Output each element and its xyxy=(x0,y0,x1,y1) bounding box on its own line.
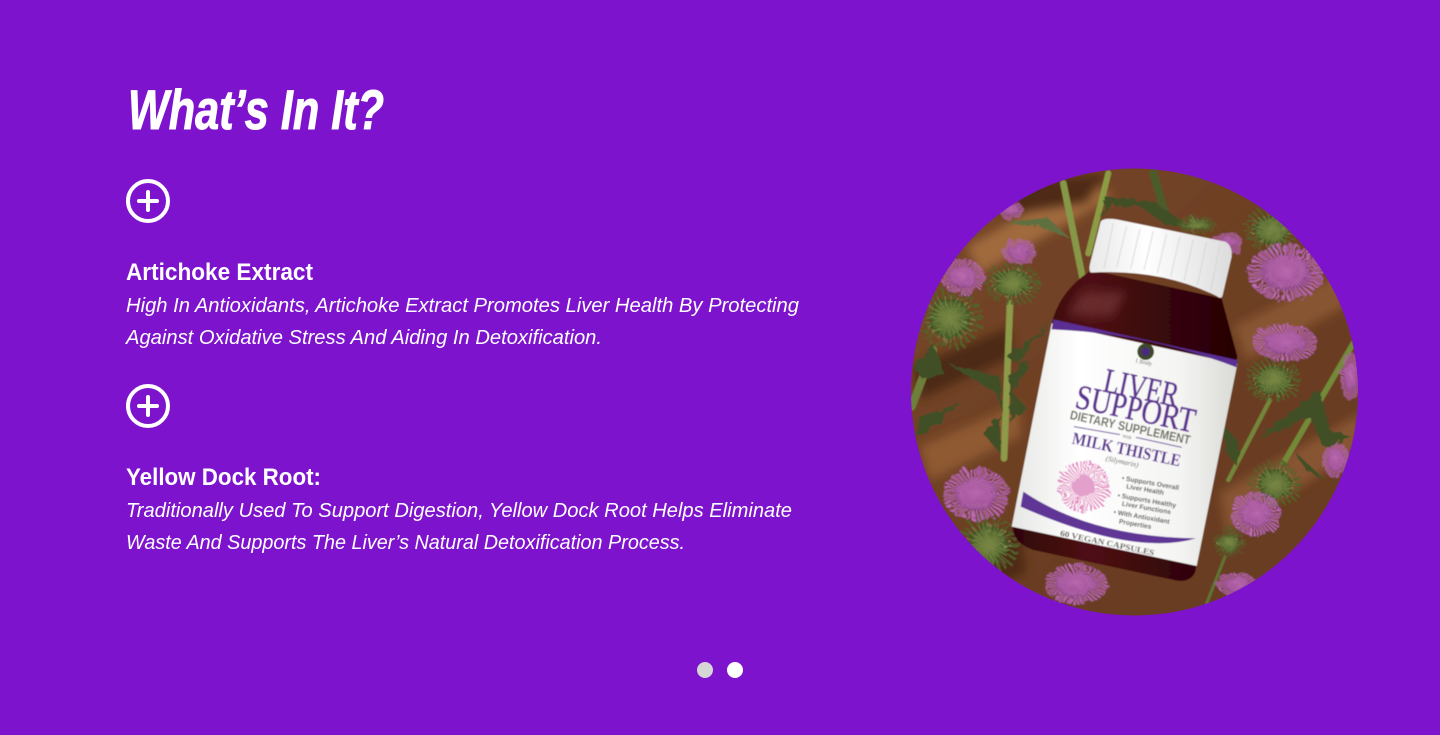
bottle: LIVER xyxy=(1100,362,1183,415)
wood background xyxy=(900,160,1370,630)
ingredient: artichoke extract: Artichoke Extract xyxy=(126,259,313,286)
label xyxy=(1012,323,1237,566)
ingredient: yellow dock root xyxy=(126,464,792,554)
carousel dot active xyxy=(727,662,743,678)
bottle: Liver Functions xyxy=(1121,501,1172,516)
bottle: (Silymarin) xyxy=(1105,454,1140,470)
ingredient: artichoke extract xyxy=(125,259,799,349)
product photo: liver support bottle on thistles xyxy=(900,160,1370,630)
bottle: DIETARY SUPPLEMENT xyxy=(1069,408,1192,447)
icon: plus circle 1 xyxy=(128,181,168,221)
thistle buds xyxy=(929,216,1292,565)
bottle xyxy=(1012,219,1237,581)
thistle flowers xyxy=(948,203,1358,598)
ingredient: artichoke extract: Against Oxidative Stress And Aiding In Detoxification. xyxy=(125,327,602,349)
bottle: Liver Health xyxy=(1126,483,1164,497)
ingredient: artichoke extract: High In Antioxidants, Artichoke Extract Promotes Liver Health By Protecting xyxy=(126,295,799,317)
bottle: With xyxy=(1122,434,1132,441)
bottle: • With Antioxidant xyxy=(1113,509,1171,526)
bottle: • Supports Overall xyxy=(1121,475,1180,492)
bottle: MILK THISTLE xyxy=(1070,429,1183,470)
thistle stems xyxy=(912,173,1353,603)
bottle: 1 Body xyxy=(1134,358,1153,368)
icon: plus circle 2 xyxy=(128,386,168,426)
bottle cap xyxy=(1089,219,1232,298)
thistle leaves xyxy=(913,197,1350,482)
ingredient: yellow dock root: Waste And Supports The Liver’s Natural Detoxification Process. xyxy=(126,532,685,554)
ingredient: yellow dock root: Yellow Dock Root: xyxy=(126,464,321,491)
bottle: 60 VEGAN CAPSULES xyxy=(1059,529,1155,558)
title: What’s In It? xyxy=(128,78,384,141)
carousel dot inactive xyxy=(697,662,713,678)
bottle: • Supports Healthy xyxy=(1117,492,1177,510)
ingredient: yellow dock root: Traditionally Used To Support Digestion, Yellow Dock Root Helps Eliminate xyxy=(126,500,792,522)
bottle: Properties xyxy=(1118,518,1152,531)
bottle: SUPPORT xyxy=(1072,378,1199,440)
